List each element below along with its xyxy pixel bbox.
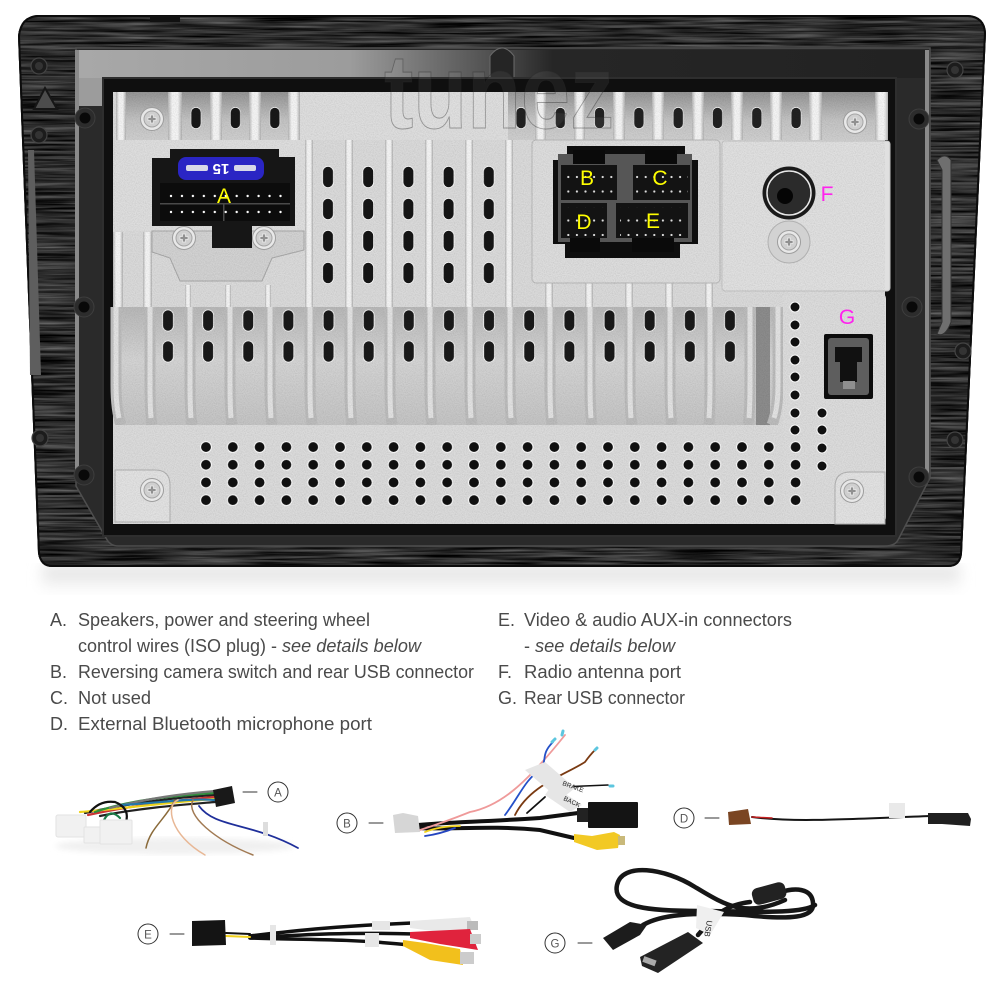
callout A: A bbox=[274, 788, 282, 800]
tag bbox=[889, 803, 905, 818]
callout D: D bbox=[680, 814, 688, 826]
callout dash bbox=[170, 933, 184, 935]
small plug bbox=[603, 922, 647, 950]
device: radio rear view bbox=[10, 10, 995, 592]
USB plug bbox=[577, 802, 638, 828]
harness A bbox=[55, 782, 298, 855]
callout dash bbox=[578, 942, 592, 944]
label D: D bbox=[576, 211, 592, 234]
bezel left light edge bbox=[75, 50, 79, 480]
label C: C bbox=[652, 167, 668, 190]
tab at top centre bbox=[490, 48, 514, 78]
lower section cells bbox=[120, 307, 775, 425]
white RCA bbox=[410, 917, 478, 932]
brown plug bbox=[728, 809, 751, 825]
harness E bbox=[138, 917, 481, 965]
tag text: USB bbox=[702, 920, 714, 937]
item G: G. bbox=[498, 688, 517, 708]
callout dash bbox=[369, 822, 383, 824]
loose wires bbox=[146, 800, 175, 848]
RCA plug bbox=[574, 832, 625, 850]
item B: B. bbox=[50, 662, 67, 682]
grain overlay bbox=[113, 92, 885, 524]
callout B bbox=[337, 813, 357, 833]
silver left strip bbox=[79, 78, 103, 106]
black plug bbox=[213, 786, 235, 807]
label E: E bbox=[646, 210, 660, 233]
ferrite bbox=[751, 881, 788, 906]
callout E bbox=[138, 924, 158, 944]
mid section fins bbox=[113, 140, 713, 310]
bezel right light edge bbox=[925, 50, 929, 480]
left groove bbox=[28, 150, 41, 375]
labels bbox=[525, 762, 582, 812]
wire tags bbox=[263, 822, 268, 836]
item A bbox=[50, 610, 422, 656]
F panel bbox=[722, 141, 890, 291]
item E: see details below bbox=[535, 636, 676, 656]
silver top band bbox=[79, 50, 925, 78]
harness B bbox=[337, 731, 638, 850]
item E: - bbox=[524, 636, 535, 656]
watermark tunez: tunez bbox=[384, 33, 614, 151]
callout G: G bbox=[551, 938, 560, 950]
mid section slots bbox=[320, 164, 496, 288]
item A: see details below bbox=[282, 636, 422, 656]
yellow RCA bbox=[403, 940, 474, 965]
wires bbox=[418, 813, 578, 825]
label B: B bbox=[580, 167, 594, 190]
frame screws bbox=[31, 58, 971, 448]
black plug bbox=[192, 920, 226, 946]
item E bbox=[498, 610, 792, 656]
USB port G bbox=[824, 306, 873, 399]
pins bbox=[564, 170, 616, 199]
cable ties bbox=[270, 921, 390, 947]
item D: D. bbox=[50, 714, 68, 734]
top strip slots bbox=[186, 105, 284, 131]
grey plug bbox=[393, 813, 420, 833]
fuse bbox=[178, 157, 264, 180]
cable bbox=[752, 816, 930, 820]
soft shadow bbox=[55, 838, 295, 854]
bottom holes bbox=[193, 438, 810, 509]
lower curved fins bbox=[116, 307, 778, 425]
pins bbox=[165, 190, 285, 218]
top strip slots right bbox=[510, 105, 806, 131]
label G: G bbox=[839, 306, 855, 329]
G panel bbox=[783, 292, 886, 524]
callout dash bbox=[243, 791, 257, 793]
corner plate left bbox=[115, 470, 170, 522]
lower section slots bbox=[160, 308, 742, 368]
label F: F bbox=[821, 183, 833, 206]
outer frame bbox=[10, 10, 995, 575]
tag bbox=[696, 905, 724, 935]
cable G bbox=[545, 870, 815, 973]
callout G bbox=[545, 933, 565, 953]
right hole columns bbox=[790, 302, 827, 471]
harness D bbox=[674, 803, 971, 828]
USB opening bbox=[642, 956, 657, 966]
jack bbox=[928, 813, 971, 826]
USB socket bbox=[640, 932, 703, 973]
legend left column bbox=[50, 610, 474, 734]
A panel bbox=[115, 140, 305, 231]
cables bbox=[250, 923, 412, 936]
black opening bbox=[103, 78, 896, 536]
bottom panel bbox=[114, 425, 885, 524]
metal chassis bbox=[113, 92, 890, 524]
callout B: B bbox=[343, 818, 351, 830]
cable loops bbox=[643, 890, 813, 925]
item B: Reversing camera switch and rear USB connector bbox=[78, 662, 474, 682]
connector B C D E bbox=[553, 146, 698, 258]
label A: A bbox=[217, 185, 231, 208]
item F: F. bbox=[498, 662, 512, 682]
item A: control wires (ISO plug) - bbox=[78, 636, 282, 656]
BCDE panel bbox=[532, 140, 720, 283]
legend right column bbox=[498, 610, 792, 708]
callout A bbox=[268, 782, 288, 802]
callout D bbox=[674, 808, 694, 828]
antenna port F bbox=[762, 166, 833, 263]
bundled wires bbox=[80, 791, 215, 822]
bracket below connector A bbox=[152, 231, 304, 281]
drop shadow under device bbox=[42, 566, 960, 592]
tag text BACK: BACK bbox=[562, 795, 582, 810]
callout dash bbox=[705, 817, 719, 819]
item E: Video & audio AUX-in connectors bbox=[524, 610, 792, 630]
recycling mark bbox=[34, 88, 57, 109]
item A: Speakers, power and steering wheel bbox=[78, 610, 370, 630]
chassis screws bbox=[140, 108, 866, 502]
white plugs bbox=[56, 815, 132, 844]
item A: A. bbox=[50, 610, 67, 630]
fuse rating: 15 bbox=[213, 160, 229, 177]
chassis base bbox=[113, 92, 885, 524]
wire tips bbox=[552, 731, 613, 786]
item C: C. bbox=[50, 688, 68, 708]
connector A bbox=[152, 149, 295, 248]
inner bezel bbox=[76, 48, 930, 546]
item F: Radio antenna port bbox=[524, 662, 681, 682]
callout E: E bbox=[144, 930, 152, 942]
frame top notch bbox=[150, 16, 180, 22]
bezel mount holes bbox=[74, 108, 929, 487]
top strip bbox=[116, 92, 888, 140]
item D: External Bluetooth microphone port bbox=[78, 714, 372, 734]
item E: E. bbox=[498, 610, 515, 630]
corner plate right bbox=[835, 472, 885, 524]
item G: Rear USB connector bbox=[524, 688, 685, 708]
tag text BRAKE: BRAKE bbox=[561, 780, 585, 795]
red RCA bbox=[410, 929, 481, 950]
right groove bbox=[937, 156, 951, 335]
item C: Not used bbox=[78, 688, 151, 708]
dark slot at right end bbox=[756, 307, 770, 425]
